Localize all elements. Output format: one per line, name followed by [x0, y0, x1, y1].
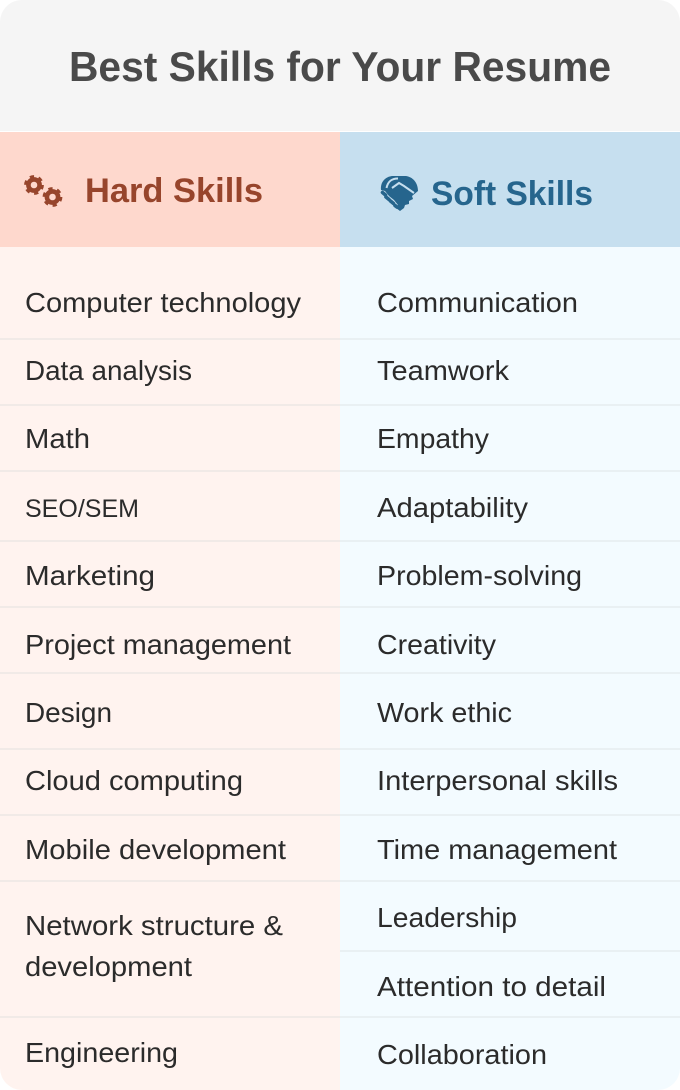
panel: hard skills list: Cloud computing — [25, 765, 243, 796]
icon: handshake — [381, 176, 418, 211]
title banner — [0, 0, 680, 131]
panel: soft skills list: Adaptability — [377, 492, 528, 523]
panel: hard skills list: Network structure & — [25, 910, 283, 941]
panel: hard skills list: development — [25, 951, 192, 982]
panel: soft skills list: Empathy — [377, 423, 489, 454]
heading: hard skills: Hard Skills — [85, 172, 263, 210]
panel: soft skills list: Communication — [377, 287, 578, 318]
panel: hard skills list: Marketing — [25, 560, 155, 591]
panel: soft skills list: Leadership — [377, 902, 517, 933]
panel: soft skills list: Creativity — [377, 629, 496, 660]
heading: soft skills: Soft Skills — [431, 175, 593, 213]
icon: gears — [26, 177, 61, 205]
panel: soft skills list: Collaboration — [377, 1039, 547, 1070]
panel: hard skills header — [0, 132, 340, 247]
panel: hard skills list: Data analysis — [25, 355, 192, 386]
panel: soft skills list: Time management — [377, 834, 617, 865]
panel: hard skills list: Mobile development — [25, 834, 286, 865]
panel: hard skills list: Math — [25, 423, 90, 454]
panel: hard skills list: SEO/SEM — [25, 495, 139, 523]
panel: hard skills list: Computer technology — [25, 287, 301, 318]
panel: soft skills list: Interpersonal skills — [377, 765, 618, 796]
title: Best Skills for Your Resume — [69, 43, 611, 90]
panel: soft skills list: Work ethic — [377, 697, 512, 728]
panel: hard skills list: Engineering — [25, 1037, 178, 1068]
panel: soft skills list — [340, 247, 680, 1090]
panel: hard skills list — [0, 247, 340, 1090]
panel: soft skills header — [340, 132, 680, 247]
panel: soft skills list: Teamwork — [377, 355, 510, 386]
panel: hard skills list: Project management — [25, 629, 291, 660]
panel: soft skills list: Problem-solving — [377, 560, 582, 591]
panel: soft skills list: Attention to detail — [377, 971, 606, 1002]
panel: hard skills list: Design — [25, 697, 112, 728]
